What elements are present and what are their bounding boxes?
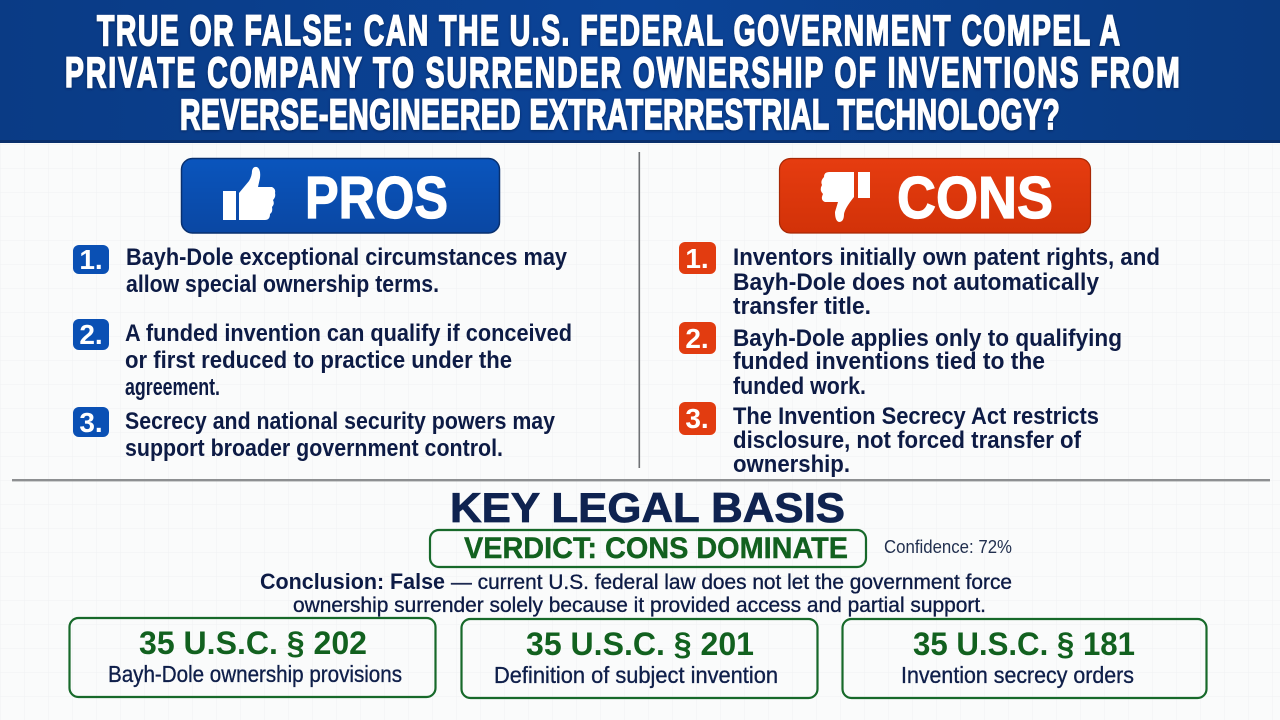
title: TRUE OR FALSE: CAN THE U.S. FEDERAL GOVERNMENT COMPEL A bbox=[97, 6, 1120, 54]
pros item 1: 1. bbox=[79, 244, 103, 275]
conclusion text bbox=[260, 569, 1012, 617]
title bbox=[65, 6, 1180, 138]
citation card: 35 USC 202: 35 U.S.C. § 202 bbox=[139, 625, 367, 661]
cons item 2: Bayh-Dole applies only to qualifying bbox=[733, 325, 1122, 352]
pros item 2: or first reduced to practice under the bbox=[125, 347, 512, 374]
pros button: PROS bbox=[305, 165, 448, 231]
pros item 3: support broader government control. bbox=[125, 435, 503, 462]
conclusion text: Conclusion: False bbox=[260, 569, 445, 594]
heading: key legal basis: KEY LEGAL BASIS bbox=[450, 484, 845, 531]
conclusion text: — current U.S. federal law does not let the government force bbox=[451, 570, 1012, 594]
cons item 2 bbox=[679, 322, 1122, 400]
pros item 2: 2. bbox=[79, 319, 103, 350]
pros item 1 bbox=[73, 244, 567, 298]
citation card: 35 USC 181: 35 U.S.C. § 181 bbox=[913, 626, 1135, 662]
pros item 3: 3. bbox=[79, 407, 103, 438]
cons item 3: disclosure, not forced transfer of bbox=[733, 427, 1082, 454]
cons item 3: 3. bbox=[685, 403, 709, 434]
panel: cons bbox=[679, 158, 1160, 478]
citation card: 35 USC 202: Bayh-Dole ownership provisions bbox=[108, 661, 402, 687]
cons button: CONS bbox=[897, 165, 1053, 231]
icon: thumbs up bbox=[223, 167, 275, 220]
cons item 1: 1. bbox=[685, 243, 709, 274]
pros item 2: agreement. bbox=[125, 374, 220, 401]
citation card: 35 USC 181: Invention secrecy orders bbox=[901, 662, 1134, 688]
cons item 1 bbox=[679, 242, 1160, 320]
citation card: 35 USC 202 bbox=[70, 618, 436, 697]
header banner bbox=[0, 0, 1280, 143]
cons item 3: ownership. bbox=[733, 451, 850, 478]
cons item 2: funded work. bbox=[733, 373, 866, 400]
conclusion text: ownership surrender solely because it provided access and partial support. bbox=[293, 593, 986, 617]
citation card: 35 USC 201: Definition of subject invention bbox=[494, 662, 778, 688]
citation card: 35 USC 181 bbox=[842, 619, 1206, 698]
pros button bbox=[182, 158, 500, 233]
pros item 3 bbox=[73, 407, 555, 462]
icon: thumbs down bbox=[821, 172, 870, 222]
cons item 3 bbox=[679, 402, 1099, 478]
title: PRIVATE COMPANY TO SURRENDER OWNERSHIP OF INVENTIONS FROM bbox=[65, 48, 1180, 96]
cons item 2: funded inventions tied to the bbox=[733, 348, 1045, 375]
confidence label: Confidence: 72% bbox=[884, 536, 1012, 557]
cons button bbox=[780, 158, 1090, 233]
citation card: 35 USC 201 bbox=[462, 619, 818, 698]
pros item 2 bbox=[73, 319, 572, 401]
pros item 3: Secrecy and national security powers may bbox=[125, 408, 555, 435]
pros item 1: allow special ownership terms. bbox=[126, 271, 439, 298]
pros item 2: A funded invention can qualify if conceived bbox=[125, 320, 572, 347]
cons item 1: Bayh-Dole does not automatically bbox=[733, 269, 1099, 296]
citation card: 35 USC 201: 35 U.S.C. § 201 bbox=[526, 626, 754, 662]
panel: pros bbox=[73, 158, 572, 462]
cons item 1: Inventors initially own patent rights, and bbox=[733, 244, 1160, 271]
title: REVERSE-ENGINEERED EXTRATERRESTRIAL TECHNOLOGY? bbox=[180, 90, 1060, 138]
cons item 2: 2. bbox=[685, 323, 709, 354]
cons item 1: transfer title. bbox=[733, 293, 871, 320]
verdict badge: VERDICT: CONS DOMINATE bbox=[464, 532, 848, 565]
pros item 1: Bayh-Dole exceptional circumstances may bbox=[126, 244, 567, 271]
cons item 3: The Invention Secrecy Act restricts bbox=[733, 403, 1099, 430]
